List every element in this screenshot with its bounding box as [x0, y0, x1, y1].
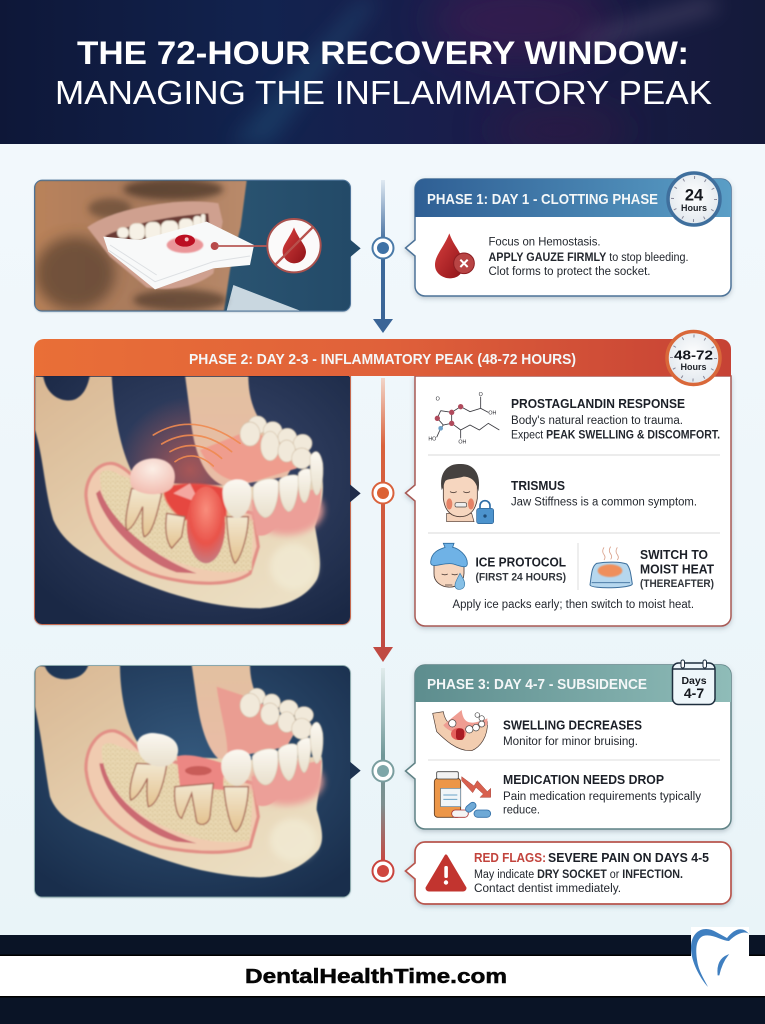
icon: tooth logo	[691, 927, 749, 987]
text block: moist heat: MOIST HEAT	[640, 562, 714, 576]
text block: swelling: Monitor for minor bruising.	[503, 736, 638, 748]
far ramus	[192, 665, 300, 760]
text block: ice protocol: ICE PROTOCOL	[476, 554, 566, 570]
panel: phase 1 card	[406, 173, 731, 296]
icon: days 4-7 calendar	[672, 660, 715, 704]
footer website text: DentalHealthTime.com	[245, 966, 507, 988]
swelling	[187, 487, 225, 563]
text block: prostaglandin: Body's natural reaction to trauma.	[511, 415, 683, 427]
timeline: phase 1	[372, 180, 394, 333]
icon: medication drop	[434, 772, 491, 817]
text block: moist heat: (THEREAFTER)	[640, 578, 714, 590]
text block: prostaglandin	[511, 396, 720, 442]
icon: 24 hour clock: Hours	[681, 203, 707, 213]
text block: moist heat	[640, 547, 714, 590]
icon: trismus face with lock	[441, 464, 494, 524]
text block: medication: MEDICATION NEEDS DROP	[503, 772, 664, 787]
icon: prostaglandin molecule: HO	[428, 437, 436, 443]
jaw body	[35, 375, 323, 608]
text block: phase 1: Focus on Hemostasis.	[488, 236, 600, 248]
text block: red flags: May indicate DRY SOCKET or INFECTION.	[474, 869, 683, 881]
text block: trismus: TRISMUS	[511, 478, 565, 493]
icon: warning triangle	[427, 856, 465, 890]
text block: phase 1	[488, 236, 688, 278]
pain arcs	[153, 424, 240, 466]
text block: red flags	[474, 850, 709, 895]
title	[58, 41, 712, 104]
middle root	[166, 513, 185, 548]
icon: days 4-7 calendar: 4-7	[684, 685, 704, 701]
cutaway	[86, 731, 258, 852]
text block: prostaglandin: PROSTAGLANDIN RESPONSE	[511, 396, 685, 411]
panel: phase 2 card	[34, 332, 731, 626]
text block: red flags: SEVERE PAIN ON DAYS 4-5	[548, 850, 709, 865]
text block: ice and heat summary: Apply ice packs early; then switch to moist heat.	[452, 599, 694, 611]
header banner	[0, 0, 765, 155]
timeline: phase 3	[372, 668, 394, 882]
jaw body	[35, 665, 322, 877]
front teeth	[252, 722, 323, 785]
icon: prostaglandin molecule: OH	[488, 410, 496, 416]
text block: trismus: Jaw Stiffness is a common symptom.	[511, 496, 697, 508]
far teeth	[240, 416, 312, 469]
text block: ice protocol: (FIRST 24 HOURS)	[476, 572, 566, 584]
callout: no bleeding icon	[211, 219, 321, 272]
icon: healing jaw	[433, 710, 487, 751]
panel: phase 3 card	[406, 660, 731, 829]
icon: 48-72 hour clock	[667, 332, 720, 384]
icon: ice pack on head	[431, 543, 467, 589]
icon: 48-72 hour clock: Hours	[680, 362, 707, 372]
page background	[0, 144, 765, 936]
text block: trismus	[511, 478, 697, 508]
far teeth	[240, 688, 313, 739]
phase 2 header bar: PHASE 2: DAY 2-3 - INFLAMMATORY PEAK (48-72 HOURS)	[189, 351, 576, 368]
icon: days 4-7 calendar: Days	[681, 675, 707, 687]
icon: 24 hour clock	[668, 173, 720, 225]
text block: moist heat: SWITCH TO	[640, 547, 708, 562]
text block: medication	[503, 772, 701, 816]
text block: red flags: Contact dentist immediately.	[474, 883, 621, 895]
text block: red flags: RED FLAGS:	[474, 850, 546, 865]
canine	[227, 517, 248, 563]
footer band	[0, 935, 765, 1024]
heading: phase 3: PHASE 3: DAY 4-7 - SUBSIDENCE	[427, 676, 647, 693]
panel: phase 1 photo	[35, 179, 361, 311]
timeline: phase 2	[372, 378, 394, 662]
text block: swelling	[503, 718, 642, 748]
heading: phase 1: PHASE 1: DAY 1 - CLOTTING PHASE	[427, 191, 658, 208]
callout: red flags	[406, 842, 731, 904]
text block: ice protocol	[476, 554, 566, 584]
front teeth	[253, 452, 323, 518]
gum	[250, 485, 323, 535]
title: MANAGING THE INFLAMMATORY PEAK	[55, 74, 712, 111]
canine	[224, 787, 248, 832]
icon: blood drop with cross	[435, 233, 474, 278]
icon: 24 hour clock: 24	[685, 186, 704, 204]
icon: prostaglandin molecule: O	[479, 392, 483, 398]
text block: medication: reduce.	[503, 804, 540, 816]
panel: phase 2 jaw illustration	[35, 375, 361, 625]
gum	[250, 758, 323, 805]
text block: phase 1: Clot forms to protect the socket.	[488, 266, 650, 278]
icon: prostaglandin molecule: O	[436, 397, 440, 403]
far ramus	[185, 375, 300, 487]
wisdom tooth	[130, 763, 167, 807]
text block: phase 1: APPLY GAUZE FIRMLY to stop bleeding.	[488, 252, 688, 264]
text block: swelling: SWELLING DECREASES	[503, 718, 642, 732]
middle roots	[175, 783, 213, 824]
icon: prostaglandin molecule: OH	[458, 439, 466, 445]
icon: moist heat pad	[590, 547, 632, 588]
text block: medication: Pain medication requirements typically	[503, 791, 701, 803]
icon: 48-72 hour clock: 48-72	[674, 348, 713, 362]
icon: prostaglandin molecule	[428, 392, 499, 445]
cutaway	[86, 463, 258, 583]
text block: prostaglandin: Expect PEAK SWELLING & DISCOMFORT.	[511, 430, 720, 442]
wisdom tooth	[126, 488, 162, 537]
panel: phase 3 jaw illustration	[35, 665, 361, 897]
phase 2 header bar	[34, 339, 731, 376]
title: THE 72-HOUR RECOVERY WINDOW:	[77, 35, 689, 71]
